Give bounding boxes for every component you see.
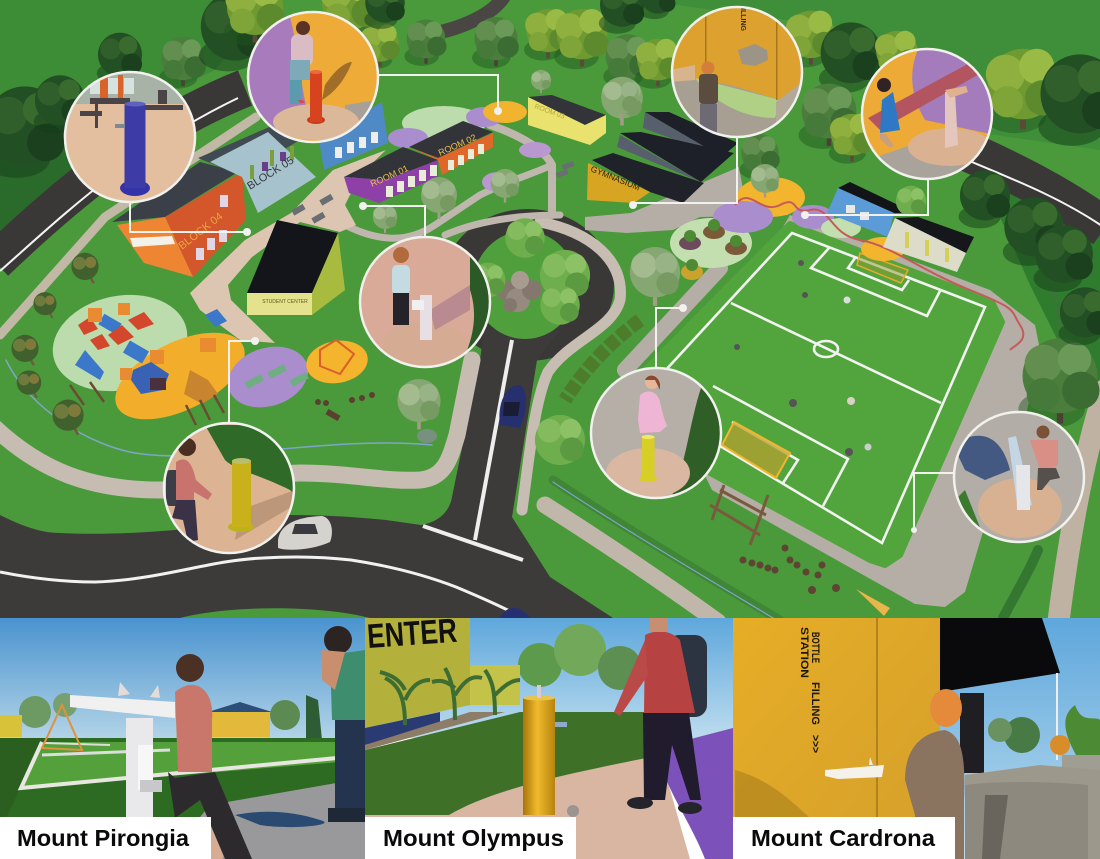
photo panel: Mount Olympus	[365, 612, 733, 859]
building: room 02: ROOM 02	[437, 132, 478, 158]
paved path	[165, 778, 365, 859]
label	[733, 817, 955, 859]
panel name: Mount Olympus	[383, 825, 564, 851]
fountain body	[307, 117, 325, 124]
white station	[126, 718, 153, 818]
wall basin	[738, 44, 768, 66]
background	[960, 693, 1100, 775]
station body	[420, 295, 432, 340]
callout: white station, boy	[355, 235, 495, 375]
callout: yellow bollard, girl in pink	[590, 365, 725, 500]
playground equipment	[70, 303, 890, 616]
photo panel: Mount Olympus: ENTER	[366, 612, 458, 656]
timber climbing frame	[710, 485, 768, 545]
fountain body	[120, 182, 150, 196]
callout anchor dots	[243, 107, 917, 533]
pennant	[856, 589, 890, 616]
hedge	[565, 320, 640, 400]
yellow wall	[733, 618, 940, 859]
ring	[591, 368, 721, 498]
yellow building	[365, 618, 470, 728]
cars	[278, 385, 526, 550]
callout: blue fountain	[60, 70, 200, 210]
bollard body	[639, 476, 657, 482]
ring	[862, 49, 992, 179]
ring	[360, 237, 490, 367]
station body	[1008, 436, 1032, 510]
orange goal	[42, 705, 82, 750]
building: block 04	[112, 162, 246, 277]
soccer field	[620, 224, 1002, 565]
station body	[945, 92, 958, 148]
callout: station, girl in blue	[860, 45, 995, 180]
callout: yellow fountain, hoodie boy	[160, 420, 300, 560]
goal bottom	[722, 422, 790, 478]
picnic tables	[291, 161, 575, 224]
ring	[164, 423, 294, 553]
boy	[699, 62, 718, 134]
sign	[798, 627, 821, 753]
footpaths	[0, 117, 1100, 627]
building: block 04: BLOCK 04	[176, 211, 225, 252]
photo panel: Mount Pirongia	[0, 618, 365, 859]
background trees	[470, 624, 642, 705]
ring	[672, 7, 802, 137]
callout leader lines	[130, 75, 954, 530]
callout: wall fountain	[670, 5, 805, 140]
building: room 03	[528, 95, 606, 145]
callout: white station, salmon shirt boy	[950, 410, 1090, 550]
building: gymnasium: GYMNASIUM	[589, 164, 642, 192]
building: room 01: ROOM 01	[369, 163, 410, 189]
label	[365, 817, 576, 859]
purple surface	[656, 728, 733, 859]
building: room 02	[409, 121, 493, 175]
callout: wall fountain: ILLING	[739, 8, 746, 31]
panel name: Mount Cardrona	[751, 825, 935, 851]
walking boy	[168, 772, 252, 859]
callout: red fountain	[245, 10, 380, 145]
walking boy	[667, 635, 707, 717]
goal top	[857, 253, 908, 283]
players	[734, 260, 872, 456]
sign: STATION	[798, 627, 810, 678]
rock feature	[495, 271, 542, 312]
black canopy	[940, 618, 1060, 692]
sign: BOTTLE	[809, 632, 821, 663]
building: white block	[883, 217, 974, 272]
ring	[248, 12, 378, 142]
far end parked car and shadow	[500, 608, 530, 618]
beige plaza	[190, 150, 386, 343]
standing boy	[335, 720, 365, 815]
building: room 03: ROOM 03	[533, 103, 565, 121]
building: blue block	[827, 182, 902, 237]
log stumps	[740, 544, 840, 594]
label	[0, 817, 211, 859]
roads	[0, 0, 1100, 618]
grey gym plaza and field surround	[585, 167, 1040, 607]
planters	[679, 219, 747, 280]
building: block 05: BLOCK 05	[245, 154, 296, 193]
building: student center: STUDENT CENTER	[262, 299, 308, 305]
background trees and buildings	[0, 693, 322, 740]
sign: >>>	[809, 735, 821, 753]
orange-haired boy	[905, 730, 964, 859]
building: gymnasium	[587, 112, 738, 203]
play zones	[44, 101, 1023, 437]
gold fountain	[523, 698, 555, 815]
lawn	[365, 712, 655, 815]
ring	[954, 412, 1084, 542]
panel name: Mount Pirongia	[17, 825, 189, 851]
sign: FILLING	[809, 682, 821, 725]
building: block 05	[198, 125, 316, 213]
photo panel: Mount Cardrona	[733, 618, 1100, 859]
campus aerial map	[0, 0, 1100, 627]
palms	[380, 668, 520, 725]
fountain body	[228, 522, 254, 532]
ring	[65, 72, 195, 202]
building: student center	[247, 220, 345, 315]
trees	[0, 0, 1100, 465]
building: block 06	[319, 102, 388, 170]
building: room 01	[344, 147, 438, 203]
palm shadow	[735, 770, 810, 818]
wall fountain	[825, 765, 884, 779]
